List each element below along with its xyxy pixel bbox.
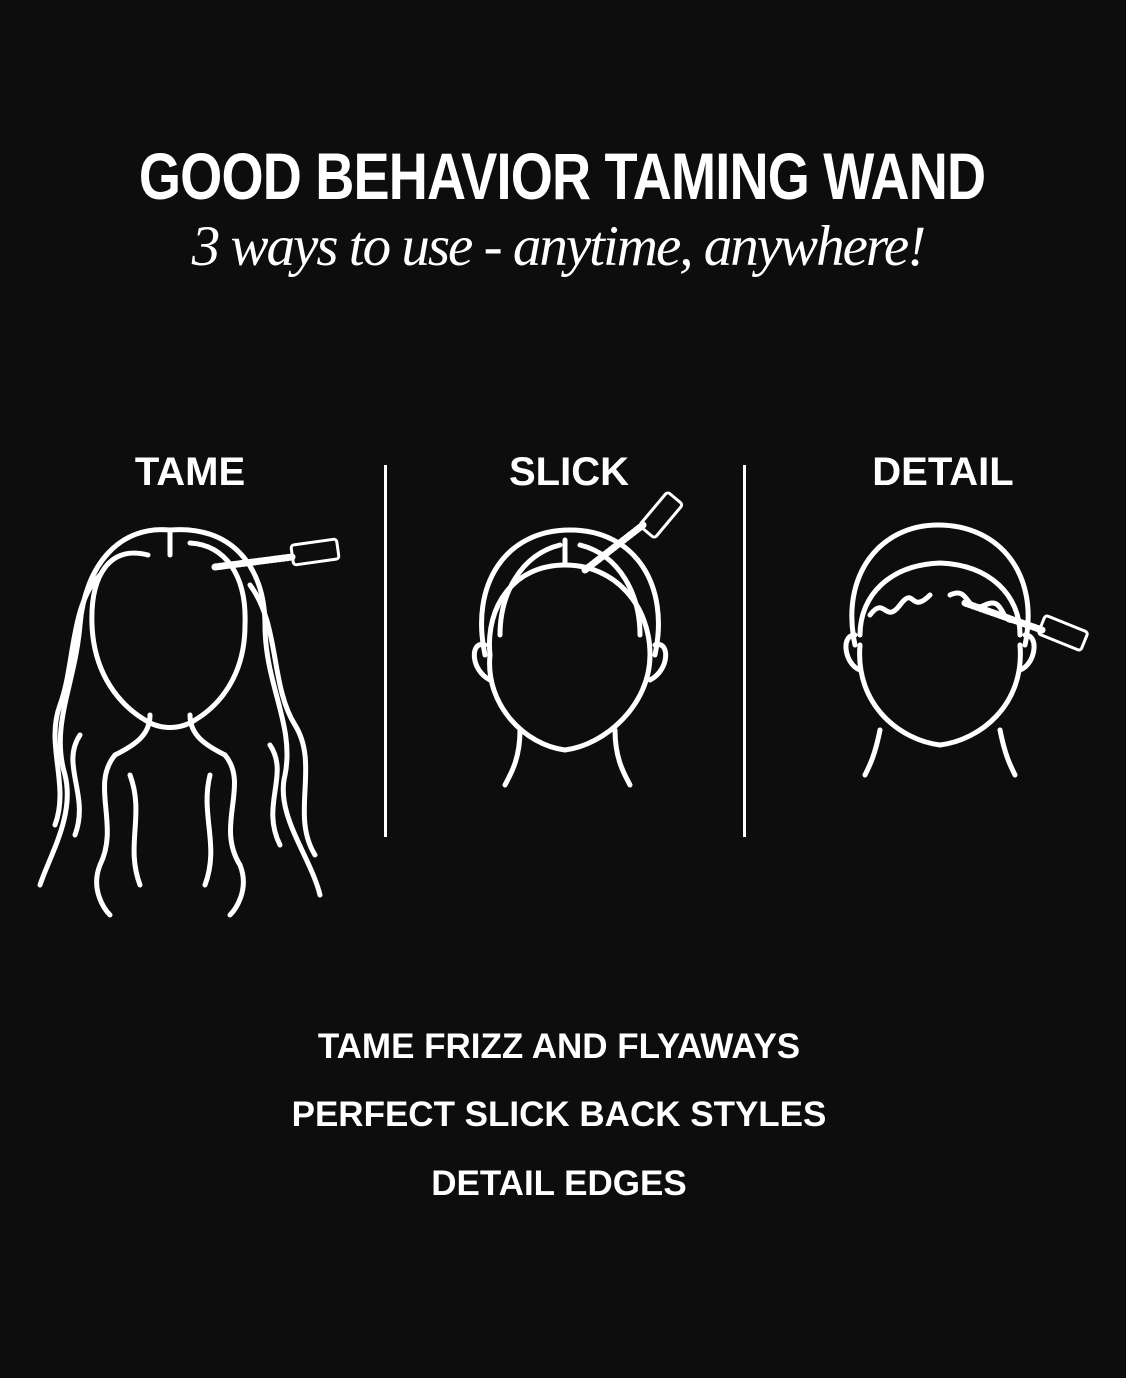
wand [965, 603, 1088, 651]
wand [215, 539, 339, 567]
label: tame: TAME [135, 450, 245, 494]
illustration: detail [843, 522, 1089, 778]
title: GOOD BEHAVIOR TAMING WAND [139, 139, 985, 213]
benefit line 3: DETAIL EDGES [431, 1164, 687, 1203]
benefit line 1: TAME FRIZZ AND FLYAWAYS [318, 1027, 800, 1066]
label: slick: SLICK [509, 450, 629, 494]
illustration: slick [472, 492, 684, 788]
subtitle: 3 ways to use - anytime, anywhere! [192, 215, 924, 278]
label: detail: DETAIL [872, 450, 1014, 494]
divider right [743, 465, 746, 837]
wand [585, 492, 683, 570]
divider left [384, 465, 387, 837]
illustration: tame [38, 527, 340, 918]
benefit line 2: PERFECT SLICK BACK STYLES [292, 1095, 826, 1134]
